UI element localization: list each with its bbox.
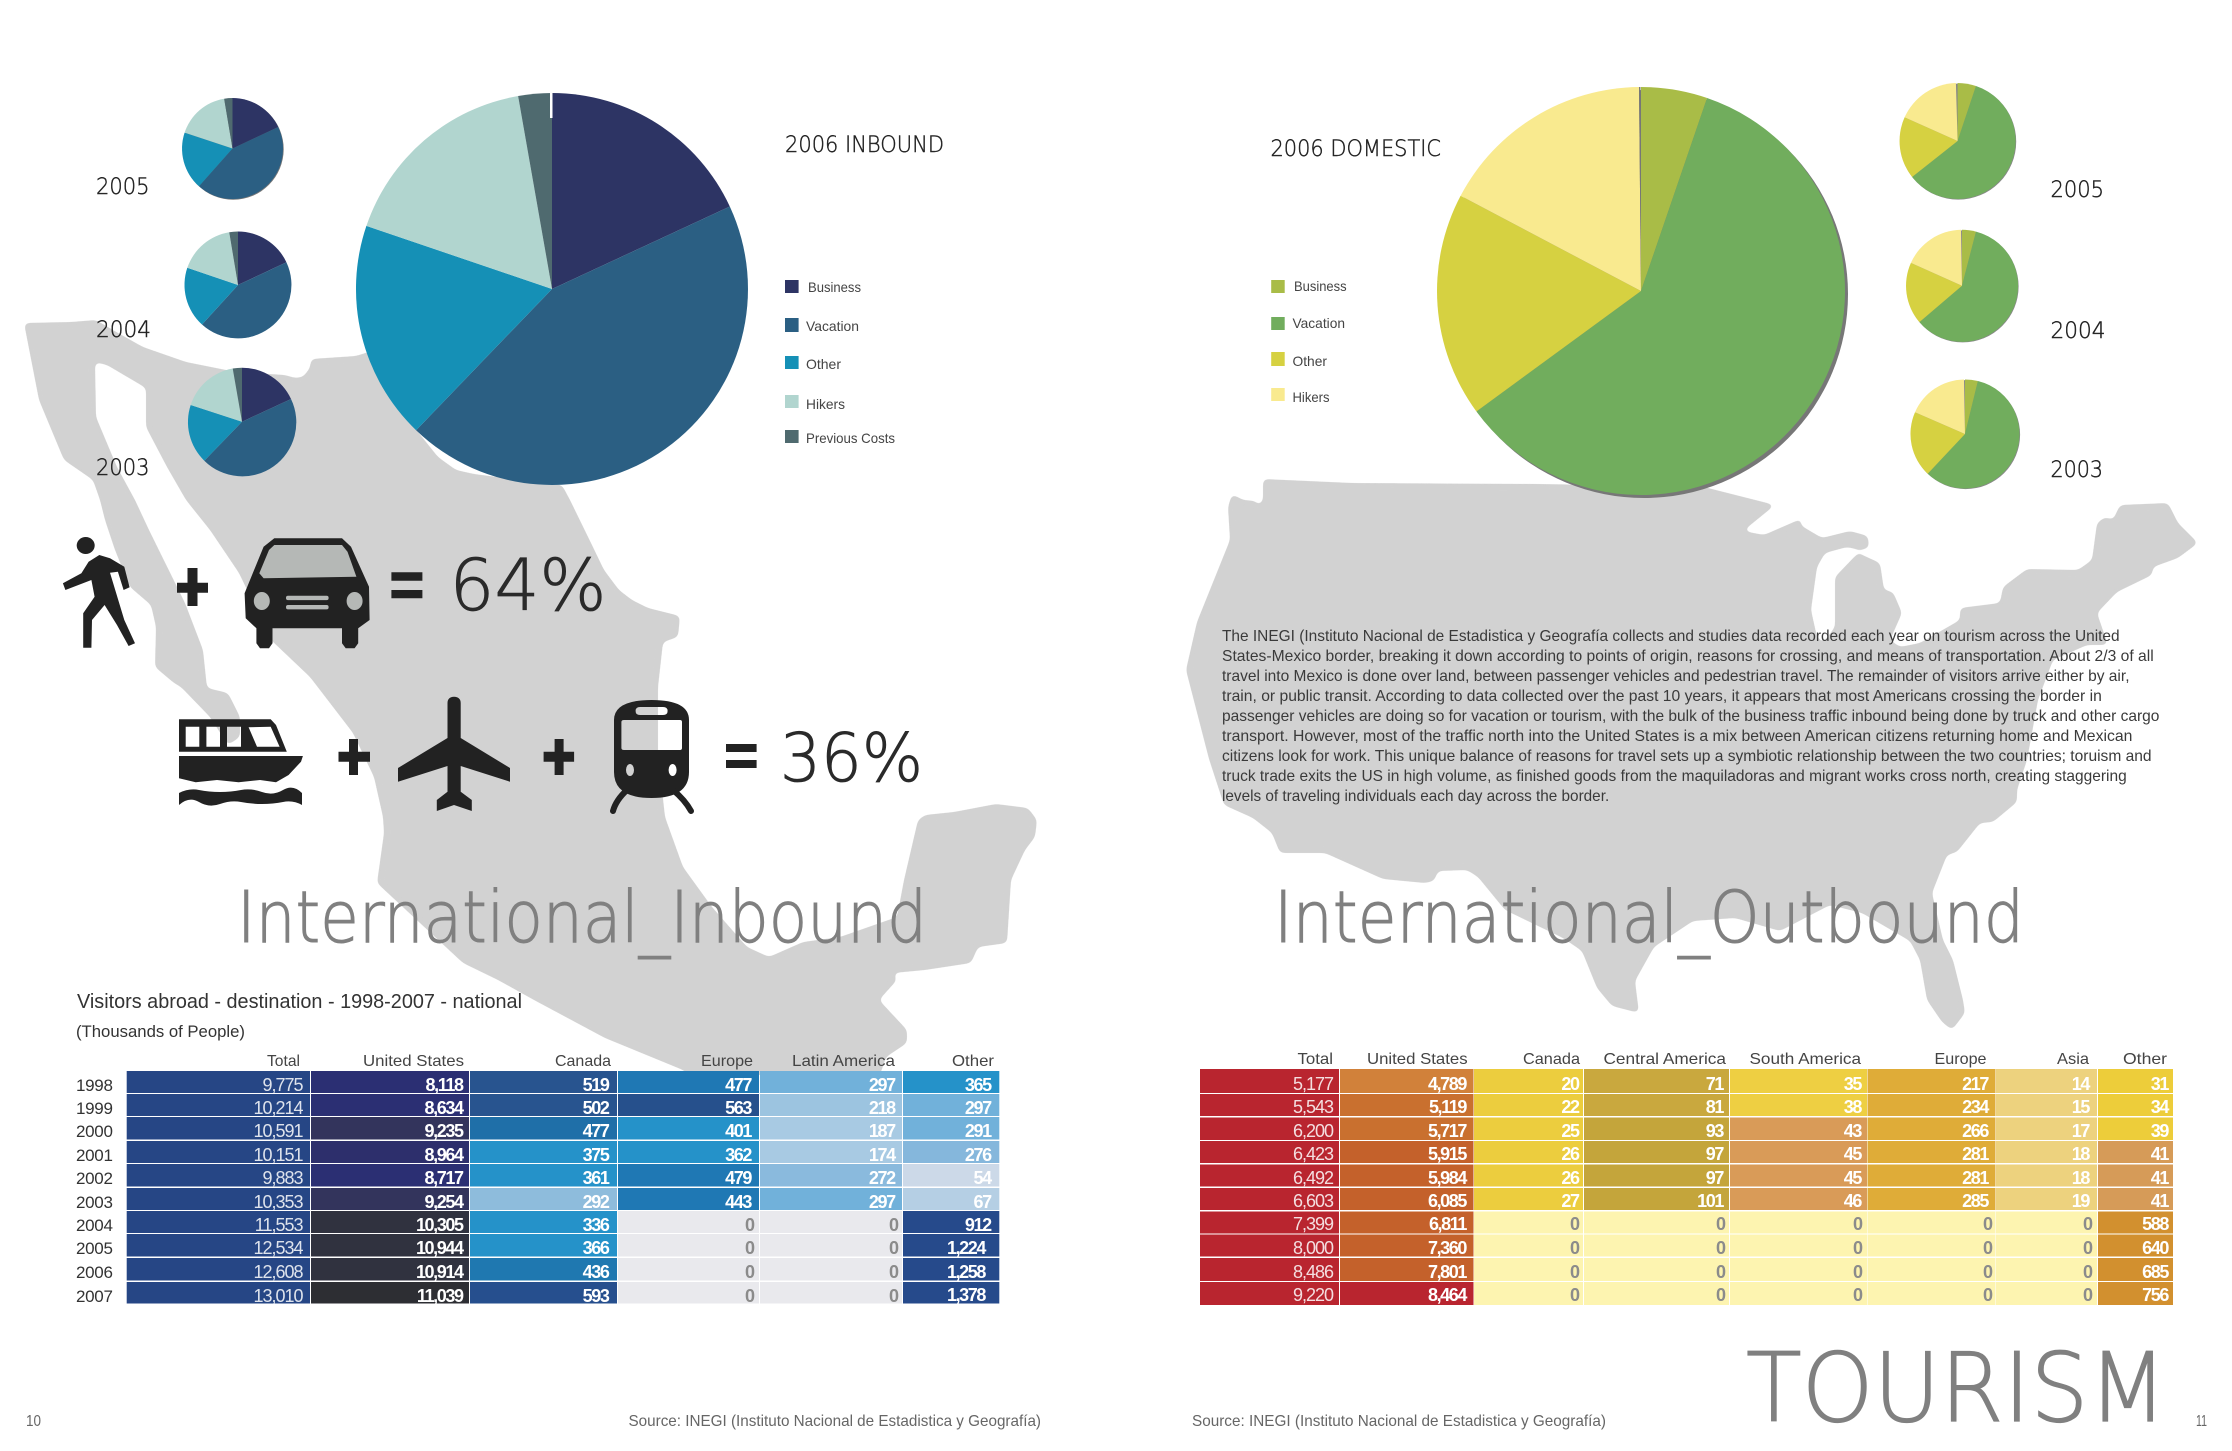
row 3: 5,717 xyxy=(1428,1121,1467,1141)
row 1998: 1998 xyxy=(76,1076,113,1095)
row 5: 45 xyxy=(1844,1168,1862,1188)
row 2005: 2005 xyxy=(76,1239,113,1258)
row 2000: 187 xyxy=(869,1121,896,1141)
icon: train xyxy=(613,700,691,811)
icon: airplane xyxy=(398,697,510,811)
pie: 2006 inbound xyxy=(356,92,748,485)
row 3: 25 xyxy=(1561,1121,1580,1141)
table header: United States xyxy=(1367,1051,1468,1068)
row 1: 14 xyxy=(2072,1074,2090,1094)
row 2: 234 xyxy=(1962,1097,1989,1117)
legend: inbound: Hikers xyxy=(806,396,845,412)
row 8: 640 xyxy=(2142,1238,2169,1258)
row 3: 39 xyxy=(2151,1121,2169,1141)
row 2: 34 xyxy=(2151,1097,2169,1117)
source: left: Source: INEGI (Instituto Nacional de Estadistica y Geografía) xyxy=(628,1413,1041,1430)
row 7: 0 xyxy=(1716,1214,1726,1234)
pie: 2006 domestic xyxy=(1437,87,1848,498)
row 8: 7,360 xyxy=(1428,1238,1467,1258)
row 2005: 0 xyxy=(889,1238,899,1258)
label: 2003: 2003 xyxy=(96,456,150,481)
row 1998 xyxy=(76,1071,999,1095)
row 5 xyxy=(1200,1164,2173,1188)
legend: domestic: Vacation xyxy=(1292,315,1345,331)
row 4: 45 xyxy=(1844,1144,1862,1164)
row 6: 19 xyxy=(2072,1191,2090,1211)
row 10: 0 xyxy=(2083,1285,2093,1305)
row 10: 0 xyxy=(1570,1285,1580,1305)
row 7: 7,399 xyxy=(1293,1214,1334,1234)
row 2004: 912 xyxy=(965,1215,992,1235)
row 2: 81 xyxy=(1706,1097,1724,1117)
row 1: 35 xyxy=(1844,1074,1862,1094)
row 4: 6,423 xyxy=(1293,1144,1334,1164)
stat: 36%: 36% xyxy=(780,719,923,797)
row 2002: 54 xyxy=(973,1168,992,1188)
row 9: 0 xyxy=(1853,1262,1863,1282)
pie: inbound 2004 xyxy=(184,232,291,338)
table header: Europe xyxy=(701,1053,753,1070)
row 2001: 174 xyxy=(869,1145,896,1165)
row 1998: 519 xyxy=(583,1075,610,1095)
stat: 64%: 64% xyxy=(450,544,606,627)
row 2002: 2002 xyxy=(76,1169,113,1188)
title: International Outbound: International_Outbound xyxy=(1274,876,2024,959)
table header xyxy=(267,1053,995,1070)
row 8: 0 xyxy=(1716,1238,1726,1258)
row 2: 38 xyxy=(1844,1097,1862,1117)
row 6 xyxy=(1200,1188,2173,1211)
row 2000: 401 xyxy=(725,1121,752,1141)
row 2004: 10,305 xyxy=(416,1215,464,1235)
row 6: 27 xyxy=(1561,1191,1580,1211)
row 2006: 10,914 xyxy=(416,1262,464,1282)
row 2007: 11,039 xyxy=(417,1286,464,1306)
table header xyxy=(1298,1051,2168,1068)
row 2006: 0 xyxy=(889,1262,899,1282)
text block: INEGI description xyxy=(1222,628,2159,805)
legend: inbound: Vacation xyxy=(806,318,859,334)
row 7 xyxy=(1200,1212,2173,1234)
row 2005 xyxy=(76,1234,999,1258)
row 2005: 1,224 xyxy=(947,1238,986,1258)
row 2002: 272 xyxy=(869,1168,896,1188)
icon: boat xyxy=(179,719,303,806)
row 2004: 336 xyxy=(583,1215,610,1235)
text block: INEGI description: train, or public transit. According to data collected over the past 10 years, it appears that most Americans crossing the border in xyxy=(1222,688,2102,705)
row 2005: 12,534 xyxy=(253,1238,303,1258)
pie: domestic 2005 xyxy=(1900,83,2016,200)
row 5: 41 xyxy=(2151,1168,2169,1188)
legend: domestic: Business xyxy=(1294,278,1347,294)
row 2004: 11,553 xyxy=(255,1215,303,1235)
row 2003: 2003 xyxy=(76,1193,113,1212)
row 2004 xyxy=(76,1211,999,1235)
row 2001: 2001 xyxy=(76,1146,113,1165)
pie: inbound 2003 xyxy=(188,368,296,476)
row 5: 26 xyxy=(1561,1168,1580,1188)
row 2001 xyxy=(76,1141,999,1165)
row 2005: 366 xyxy=(583,1238,610,1258)
row 2003: 67 xyxy=(973,1192,992,1212)
row 4 xyxy=(1200,1141,2173,1164)
row 2006: 1,258 xyxy=(947,1262,986,1282)
row 6: 285 xyxy=(1962,1191,1989,1211)
row 2002 xyxy=(76,1164,999,1188)
legend: inbound xyxy=(785,279,895,446)
row 2004: 2004 xyxy=(76,1216,113,1235)
row 2 xyxy=(1200,1094,2173,1117)
table header: Asia xyxy=(2057,1051,2089,1068)
row 8 xyxy=(1200,1234,2173,1258)
row 2003: 443 xyxy=(725,1192,752,1212)
text block: INEGI description: transport. However, most of the traffic north into the United States is a mix between American citizens returning home and Mexican xyxy=(1222,728,2132,745)
row 2007: 13,010 xyxy=(253,1286,303,1306)
row 8: 0 xyxy=(1983,1238,1993,1258)
table: inbound visitors xyxy=(76,1053,999,1306)
row 1: 31 xyxy=(2151,1074,2169,1094)
label: 2005: 2005 xyxy=(2050,178,2104,203)
row 2000: 477 xyxy=(583,1121,610,1141)
row 2002: 8,717 xyxy=(425,1168,464,1188)
row 2: 22 xyxy=(1561,1097,1580,1117)
table header: Central America xyxy=(1604,1051,1726,1068)
heading: visitors abroad: Visitors abroad - destination - 1998-2007 - national xyxy=(77,991,522,1013)
row 9: 7,801 xyxy=(1428,1262,1467,1282)
row 2003: 10,353 xyxy=(253,1192,303,1212)
page number: 10: 10 xyxy=(26,1413,41,1430)
row 1999 xyxy=(76,1094,999,1118)
row 10 xyxy=(1200,1282,2173,1305)
row 6: 101 xyxy=(1697,1191,1724,1211)
row 4: 281 xyxy=(1962,1144,1989,1164)
row 1998: 9,775 xyxy=(262,1075,303,1095)
row 2000: 9,235 xyxy=(425,1121,464,1141)
title: TOURISM: TOURISM xyxy=(1746,1334,2167,1444)
row 2001: 362 xyxy=(725,1145,752,1165)
row 2007 xyxy=(76,1282,999,1306)
label: 2004: 2004 xyxy=(2050,319,2106,344)
label: 2005: 2005 xyxy=(96,175,150,200)
pie: domestic 2003 xyxy=(1910,379,2020,489)
row 2002: 479 xyxy=(725,1168,752,1188)
row 6: 6,603 xyxy=(1293,1191,1334,1211)
icon: pedestrian xyxy=(63,537,135,648)
legend: domestic: Hikers xyxy=(1292,389,1330,405)
text block: INEGI description: travel into Mexico is done over land, between passenger vehicles and pedestrian travel. The remainder of visitors arrive either by air, xyxy=(1222,668,2130,685)
row 4: 5,915 xyxy=(1428,1144,1467,1164)
row 1998: 8,118 xyxy=(426,1075,464,1095)
row 7: 6,811 xyxy=(1429,1214,1467,1234)
text block: INEGI description: The INEGI (Instituto Nacional de Estadistica y Geografía collects and studies data recorded each year on tourism across the United xyxy=(1222,628,2120,645)
row 7: 0 xyxy=(1983,1214,1993,1234)
row 7: 588 xyxy=(2142,1214,2169,1234)
legend: domestic: Other xyxy=(1292,353,1327,369)
map: United States xyxy=(1186,479,2198,1030)
row 2007: 1,378 xyxy=(947,1285,986,1305)
row 2006: 2006 xyxy=(76,1263,113,1282)
row 2003 xyxy=(76,1188,999,1212)
row 3: 43 xyxy=(1844,1121,1862,1141)
row 7: 0 xyxy=(1853,1214,1863,1234)
source: right: Source: INEGI (Instituto Nacional de Estadistica y Geografía) xyxy=(1192,1413,1606,1430)
row 4: 97 xyxy=(1706,1144,1724,1164)
row 8: 0 xyxy=(1853,1238,1863,1258)
row 5: 97 xyxy=(1706,1168,1724,1188)
row 1998: 365 xyxy=(965,1075,992,1095)
row 1998: 477 xyxy=(725,1075,752,1095)
row 6: 41 xyxy=(2151,1191,2169,1211)
table: outbound visitors xyxy=(1200,1051,2173,1305)
row 2000: 291 xyxy=(965,1121,992,1141)
legend: inbound: Business xyxy=(808,279,861,295)
row 1999: 8,634 xyxy=(425,1098,464,1118)
row 2005: 0 xyxy=(745,1238,755,1258)
row 2002: 9,883 xyxy=(262,1168,303,1188)
map: Mexico xyxy=(24,320,1037,1075)
row 2006: 12,608 xyxy=(253,1262,303,1282)
row 3: 17 xyxy=(2072,1121,2090,1141)
table header: Other xyxy=(2123,1051,2168,1068)
page number: 11: 11 xyxy=(2196,1413,2207,1430)
table header: Total xyxy=(267,1053,300,1070)
row 9: 0 xyxy=(1570,1262,1580,1282)
row 7: 0 xyxy=(2083,1214,2093,1234)
text block: INEGI description: levels of traveling individuals each day across the border. xyxy=(1222,788,1609,805)
row 2005: 10,944 xyxy=(416,1238,464,1258)
row 1 xyxy=(1200,1069,2173,1094)
row 10: 8,464 xyxy=(1428,1285,1467,1305)
icon: plus xyxy=(544,739,574,775)
row 2002: 361 xyxy=(583,1168,610,1188)
table header: Canada xyxy=(1523,1051,1580,1068)
row 9: 0 xyxy=(1716,1262,1726,1282)
row 6: 6,085 xyxy=(1428,1191,1467,1211)
text block: INEGI description: States-Mexico border, breaking it down according to points of origin, reasons for crossing, and means of transportation. About 2/3 of all xyxy=(1222,648,2154,665)
row 1: 71 xyxy=(1706,1074,1724,1094)
row 2000 xyxy=(76,1117,999,1141)
row 2004: 0 xyxy=(889,1215,899,1235)
row 3 xyxy=(1200,1118,2173,1141)
row 1999: 10,214 xyxy=(253,1098,303,1118)
label: 2003: 2003 xyxy=(2050,458,2103,483)
legend: inbound: Previous Costs xyxy=(806,430,895,446)
text block: INEGI description: truck trade exits the US in high volume, as finished goods from the maquiladoras and migrant works cross north, creating staggering xyxy=(1222,768,2127,785)
label: 2004: 2004 xyxy=(96,318,151,343)
pie: inbound 2005 xyxy=(182,98,284,200)
row 1999: 502 xyxy=(583,1098,610,1118)
row 1: 4,789 xyxy=(1428,1074,1467,1094)
row 2006 xyxy=(76,1258,999,1282)
table header: Canada xyxy=(555,1053,611,1070)
row 1998: 297 xyxy=(869,1075,896,1095)
legend: domestic xyxy=(1271,278,1347,405)
icon: equals xyxy=(726,744,757,768)
icon: plus xyxy=(177,568,208,606)
row 10: 9,220 xyxy=(1293,1285,1334,1305)
row 9: 685 xyxy=(2142,1262,2169,1282)
table header: Europe xyxy=(1934,1051,1987,1068)
row 1999: 563 xyxy=(725,1098,752,1118)
row 4: 18 xyxy=(2072,1144,2090,1164)
subheading: thousands of people: (Thousands of People) xyxy=(76,1022,245,1041)
row 5: 5,984 xyxy=(1428,1168,1467,1188)
row 9: 0 xyxy=(1983,1262,1993,1282)
text block: INEGI description: passenger vehicles are doing so for vacation or tourism, with the bulk of the business traffic inbound being done by truck and other cargo xyxy=(1222,708,2159,725)
row 3: 6,200 xyxy=(1293,1121,1334,1141)
row 9 xyxy=(1200,1258,2173,1282)
heading: 2006 inbound: 2006 INBOUND xyxy=(785,133,944,158)
row 10: 0 xyxy=(1716,1285,1726,1305)
table header: Total xyxy=(1298,1051,1333,1068)
row 2001: 375 xyxy=(583,1145,610,1165)
row 5: 281 xyxy=(1962,1168,1989,1188)
row 8: 8,000 xyxy=(1293,1238,1334,1258)
row 2007: 0 xyxy=(889,1286,899,1306)
row 10: 0 xyxy=(1983,1285,1993,1305)
legend: inbound: Other xyxy=(806,356,841,372)
row 3: 266 xyxy=(1962,1121,1989,1141)
row 2006: 436 xyxy=(583,1262,610,1282)
row 1999: 297 xyxy=(965,1098,992,1118)
icon: plus xyxy=(338,739,370,775)
row 2: 5,543 xyxy=(1293,1097,1334,1117)
row 2: 5,119 xyxy=(1429,1097,1467,1117)
row 5: 18 xyxy=(2072,1168,2090,1188)
table header: United States xyxy=(363,1053,464,1070)
text block: INEGI description: citizens look for work. This unique balance of reasons for travel sets up a symbiotic relationship between the two countries; toruism and xyxy=(1222,748,2152,765)
row 2: 15 xyxy=(2072,1097,2090,1117)
row 2004: 0 xyxy=(745,1215,755,1235)
pie: domestic 2004 xyxy=(1906,230,2019,342)
row 8: 0 xyxy=(2083,1238,2093,1258)
row 2003: 297 xyxy=(869,1192,896,1212)
row 6: 46 xyxy=(1844,1191,1862,1211)
row 2001: 8,964 xyxy=(425,1145,464,1165)
row 2001: 10,151 xyxy=(253,1145,303,1165)
icon: car xyxy=(245,538,370,648)
row 2003: 292 xyxy=(583,1192,610,1212)
row 1: 217 xyxy=(1962,1074,1989,1094)
row 2007: 2007 xyxy=(76,1287,113,1306)
heading: 2006 domestic: 2006 DOMESTIC xyxy=(1270,137,1441,162)
row 5: 6,492 xyxy=(1293,1168,1334,1188)
row 9: 8,486 xyxy=(1293,1262,1334,1282)
row 1999: 218 xyxy=(869,1098,896,1118)
row 2006: 0 xyxy=(745,1262,755,1282)
table header: Other xyxy=(952,1053,995,1070)
icon: equals xyxy=(391,572,422,598)
table header: Latin America xyxy=(792,1053,895,1070)
row 1999: 1999 xyxy=(76,1099,113,1118)
row 2007: 0 xyxy=(745,1286,755,1306)
row 1: 5,177 xyxy=(1293,1074,1334,1094)
row 2003: 9,254 xyxy=(425,1192,464,1212)
row 7: 0 xyxy=(1570,1214,1580,1234)
table header: South America xyxy=(1750,1051,1861,1068)
row 3: 93 xyxy=(1706,1121,1724,1141)
row 4: 26 xyxy=(1561,1144,1580,1164)
row 8: 0 xyxy=(1570,1238,1580,1258)
row 1: 20 xyxy=(1561,1074,1580,1094)
row 2000: 2000 xyxy=(76,1122,113,1141)
row 2007: 593 xyxy=(583,1286,610,1306)
row 2001: 276 xyxy=(965,1145,992,1165)
row 9: 0 xyxy=(2083,1262,2093,1282)
row 2000: 10,591 xyxy=(253,1121,303,1141)
row 4: 41 xyxy=(2151,1144,2169,1164)
row 10: 0 xyxy=(1853,1285,1863,1305)
title: International Inbound: International_Inbound xyxy=(237,876,927,959)
row 10: 756 xyxy=(2142,1285,2169,1305)
